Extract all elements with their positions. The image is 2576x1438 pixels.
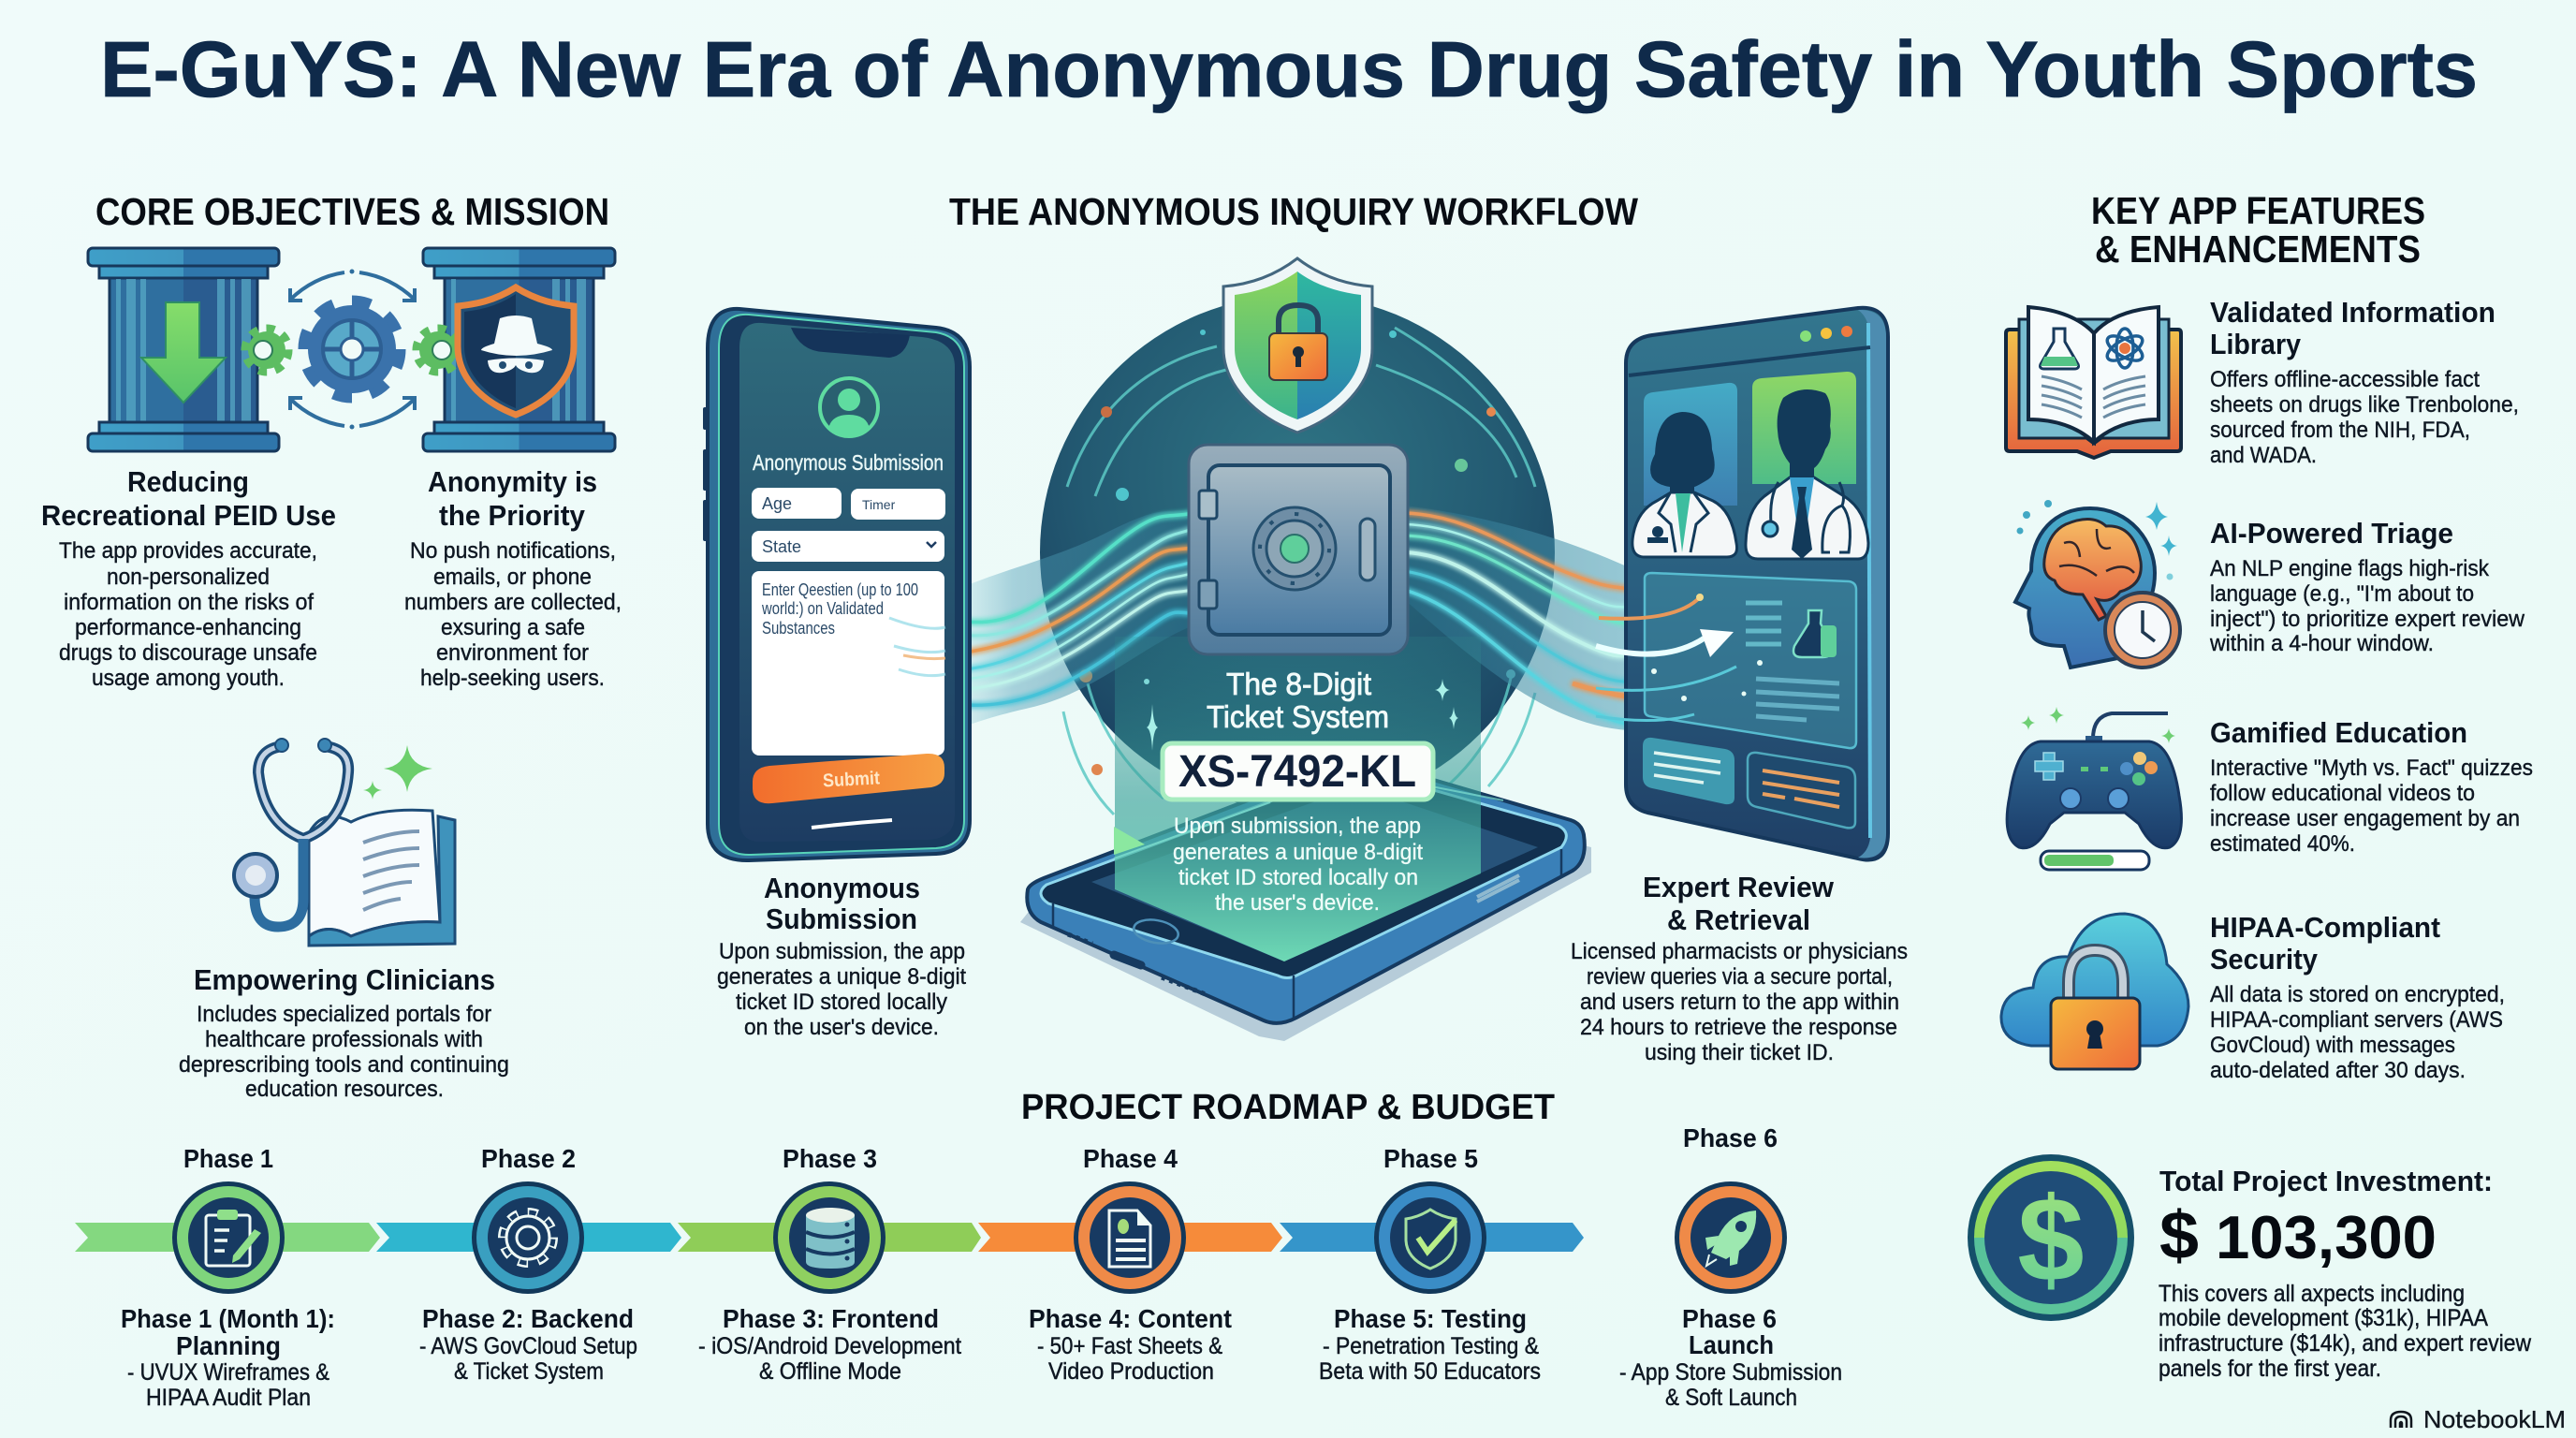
response panel xyxy=(1596,573,1856,748)
text block: AI-powered triage: inject") to prioritize expert review xyxy=(2210,607,2525,632)
phase 2 node: Phase 2 xyxy=(481,1144,576,1173)
text block: validated information library: Library xyxy=(2210,328,2302,360)
text block: AI-powered triage: An NLP engine flags high-risk xyxy=(2210,556,2490,581)
text block: 8-digit ticket system: The 8-Digit xyxy=(1226,667,1371,701)
reviewer cards xyxy=(1632,372,1868,559)
text block: phase 3 details: & Offline Mode xyxy=(759,1358,901,1385)
text block: validated information library: Offers offline-accessible fact xyxy=(2210,367,2480,392)
icon: anonymous shield xyxy=(458,287,574,415)
text block: HIPAA security: All data is stored on encrypted, xyxy=(2210,982,2505,1007)
text block: phase 5 details: - Penetration Testing & xyxy=(1323,1333,1539,1359)
text block: gamified education xyxy=(2210,716,2533,857)
text block: total project investment: This covers all axpects including xyxy=(2159,1281,2465,1307)
icon: dollar coin xyxy=(1968,1154,2134,1321)
data stream: safe to tablet xyxy=(1404,506,1694,730)
form fields: Timer xyxy=(862,497,896,512)
icon: safe xyxy=(1189,445,1408,654)
form fields: Enter Qeestien (up to 100 xyxy=(762,580,918,599)
text block: expert review: & Retrieval xyxy=(1667,903,1810,936)
total amount: 103,300 xyxy=(2216,1203,2437,1271)
text block: validated information library: sourced from the NIH, FDA, xyxy=(2210,418,2470,443)
icon: expert tablet xyxy=(1596,308,1888,859)
text block: 8-digit ticket system: the user's device. xyxy=(1215,890,1380,916)
text block: reducing recreational PEID use: usage among youth. xyxy=(92,666,285,691)
text block: reducing recreational PEID use: Reducing xyxy=(127,465,249,498)
submit button: Submit xyxy=(822,768,881,792)
ticket id: XS-7492-KL xyxy=(1178,747,1416,797)
text block: empowering clinicians: education resources. xyxy=(245,1077,444,1102)
small cards xyxy=(1643,738,1855,828)
icon: smartphone form: Anonymous Submission xyxy=(753,450,944,475)
text block: 8-digit ticket system: ticket ID stored locally on xyxy=(1178,865,1418,890)
icon: security shield xyxy=(1223,258,1372,433)
text block: phase 1 details: Planning xyxy=(176,1331,281,1360)
text block: phase 6 details: Launch xyxy=(1689,1330,1774,1359)
icon: dollar coin: $ xyxy=(2017,1173,2085,1307)
text block: validated information library: and WADA. xyxy=(2210,443,2317,468)
phase 1 node: Phase 1 xyxy=(183,1144,273,1173)
text block: phase 5 details: Beta with 50 Educators xyxy=(1319,1358,1541,1385)
text block: 8-digit ticket system xyxy=(1163,667,1433,916)
text block: phase 5 details xyxy=(1319,1304,1541,1385)
text block: phase 6 details: - App Store Submission xyxy=(1619,1359,1842,1386)
text block: phase 2 details xyxy=(419,1304,637,1385)
phase 5 node xyxy=(1374,1144,1486,1294)
text block: anonymity is the priority: exsuring a safe xyxy=(441,615,585,640)
text block: total project investment xyxy=(2159,1165,2532,1382)
text block: AI-powered triage: within a 4-hour window. xyxy=(2209,631,2434,656)
form fields: world:) on Validated xyxy=(761,599,884,618)
phase 2 node xyxy=(472,1144,584,1294)
text block: phase 6 details: & Soft Launch xyxy=(1665,1385,1797,1411)
text block: anonymity is the priority: environment for xyxy=(436,640,589,666)
text block: phase 1 details xyxy=(121,1304,335,1411)
text block: empowering clinicians: Empowering Clinicians xyxy=(194,963,495,996)
phase 6 node xyxy=(1675,1123,1787,1294)
text block: expert review xyxy=(1571,871,1908,1065)
text block: expert review: Expert Review xyxy=(1643,871,1835,903)
text block: anonymous submission: ticket ID stored locally xyxy=(736,990,947,1015)
heading: roadmap: PROJECT ROADMAP & BUDGET xyxy=(1021,1088,1555,1127)
form fields xyxy=(752,488,945,756)
text block: phase 3 details: - iOS/Android Development xyxy=(698,1333,961,1359)
text block: expert review: using their ticket ID. xyxy=(1645,1040,1834,1065)
text block: phase 4 details: Phase 4: Content xyxy=(1029,1304,1232,1333)
text block: expert review: 24 hours to retrieve the response xyxy=(1580,1015,1897,1040)
text block: HIPAA security: GovCloud) with messages xyxy=(2210,1033,2455,1058)
text block: anonymous submission xyxy=(717,872,966,1040)
text block: phase 4 details xyxy=(1029,1304,1232,1385)
text block: expert review: and users return to the app within xyxy=(1580,990,1899,1015)
text block: 8-digit ticket system: Ticket System xyxy=(1207,699,1389,734)
heading: key features: KEY APP FEATURES xyxy=(2091,189,2425,232)
text block: total project investment: Total Project Investment: xyxy=(2159,1165,2493,1197)
text block: AI-powered triage xyxy=(2209,517,2525,656)
phase 6 node: Phase 6 xyxy=(1683,1123,1778,1152)
text block: reducing recreational PEID use: performance-enhancing xyxy=(75,615,301,640)
text block: 8-digit ticket system: generates a unique 8-digit xyxy=(1173,840,1423,865)
phase 3 node xyxy=(773,1144,886,1294)
text block: 8-digit ticket system: Upon submission, the app xyxy=(1174,814,1421,839)
icon: stethoscope and book xyxy=(234,739,455,946)
text block: anonymity is the priority: emails, or phone xyxy=(433,565,592,590)
icon: pillar with down arrow xyxy=(88,248,279,451)
text block: gamified education: estimated 40%. xyxy=(2210,831,2355,857)
icon: central gears with cycle arrows xyxy=(246,270,459,429)
heading: workflow: THE ANONYMOUS INQUIRY WORKFLOW xyxy=(949,190,1638,233)
text block: phase 4 details: Video Production xyxy=(1048,1358,1214,1385)
text block: empowering clinicians: Includes specialized portals for xyxy=(197,1002,491,1027)
total amount: $ xyxy=(2159,1198,2199,1273)
text block: gamified education: increase user engagement by an xyxy=(2210,806,2520,831)
text block: phase 1 details: Phase 1 (Month 1): xyxy=(121,1304,335,1333)
text block: anonymous submission: Anonymous xyxy=(764,872,920,904)
form fields: Age xyxy=(762,494,792,513)
text block: anonymity is the priority xyxy=(404,465,622,691)
text block: HIPAA security: HIPAA-compliant servers (AWS xyxy=(2210,1007,2503,1033)
watermark: NotebookLM: NotebookLM xyxy=(2423,1405,2566,1433)
text block: phase 2 details: & Ticket System xyxy=(454,1358,604,1385)
text block: phase 2 details: - AWS GovCloud Setup xyxy=(419,1333,637,1359)
icon: bottom phone xyxy=(1020,761,1591,1041)
text block: HIPAA security: HIPAA-Compliant xyxy=(2210,911,2440,944)
text block: phase 5 details: Phase 5: Testing xyxy=(1334,1304,1527,1333)
text block: anonymity is the priority: help-seeking users. xyxy=(420,666,605,691)
text block: HIPAA security: Security xyxy=(2210,943,2319,976)
text block: anonymity is the priority: No push notifications, xyxy=(410,538,616,564)
text block: AI-powered triage: AI-Powered Triage xyxy=(2210,517,2453,550)
light beam xyxy=(1114,637,1503,961)
icon: gamepad xyxy=(2007,707,2181,870)
heading: core objectives: CORE OBJECTIVES & MISSION xyxy=(95,190,609,233)
icon: AI triage head xyxy=(2015,500,2180,668)
text block: phase 2 details: Phase 2: Backend xyxy=(422,1304,634,1333)
form fields: State xyxy=(762,537,801,556)
text block: total project investment: infrastructure ($14k), and expert review xyxy=(2159,1330,2532,1357)
text block: reducing recreational PEID use: Recreational PEID Use xyxy=(41,499,336,532)
text block: expert review: review queries via a secure portal, xyxy=(1587,964,1893,990)
avatar xyxy=(820,378,878,436)
text block: gamified education: follow educational videos to xyxy=(2210,781,2475,806)
text block: anonymous submission: Submission xyxy=(766,902,917,935)
submit button xyxy=(753,754,944,803)
text block: HIPAA security xyxy=(2210,911,2505,1083)
icon: validated library book xyxy=(2006,307,2181,458)
text block: reducing recreational PEID use: drugs to discourage unsafe xyxy=(59,640,317,666)
text block: empowering clinicians xyxy=(179,963,509,1102)
text block: anonymous submission: on the user's device. xyxy=(744,1015,939,1040)
text block: phase 4 details: - 50+ Fast Sheets & xyxy=(1037,1333,1222,1359)
text block: phase 6 details: Phase 6 xyxy=(1682,1304,1777,1333)
phase 3 node: Phase 3 xyxy=(783,1144,877,1173)
text block: phase 3 details: Phase 3: Frontend xyxy=(723,1304,939,1333)
text block: validated information library: Validated Information xyxy=(2210,296,2496,329)
icon: smartphone form xyxy=(703,309,970,860)
text block: anonymity is the priority: the Priority xyxy=(439,499,586,532)
icon: cloud lock xyxy=(2001,914,2188,1069)
text block: anonymous submission: Upon submission, the app xyxy=(719,939,965,964)
disc background xyxy=(1040,295,1555,814)
text block: gamified education: Gamified Education xyxy=(2210,716,2467,749)
text block: anonymous submission: generates a unique 8-digit xyxy=(717,964,966,990)
heading: key features: & ENHANCEMENTS xyxy=(2095,227,2421,271)
text block: phase 6 details xyxy=(1619,1304,1842,1411)
text block: gamified education: Interactive "Myth vs. Fact" quizzes xyxy=(2210,756,2533,781)
text block: validated information library xyxy=(2210,296,2519,468)
phase 4 node xyxy=(1074,1144,1186,1294)
phase 1 node xyxy=(172,1144,285,1294)
text block: phase 3 details xyxy=(698,1304,961,1385)
phase 5 node: Phase 5 xyxy=(1383,1144,1478,1173)
text block: expert review: Licensed pharmacists or physicians xyxy=(1571,939,1908,964)
text block: empowering clinicians: healthcare professionals with xyxy=(205,1027,483,1052)
text block: phase 1 details: HIPAA Audit Plan xyxy=(146,1385,311,1411)
text block: reducing recreational PEID use: information on the risks of xyxy=(64,590,314,615)
text block: anonymity is the priority: numbers are collected, xyxy=(404,590,622,615)
form fields: Substances xyxy=(762,619,835,638)
text block: reducing recreational PEID use: The app provides accurate, xyxy=(59,538,317,564)
text block: reducing recreational PEID use: non-personalized xyxy=(107,565,270,590)
text block: anonymity is the priority: Anonymity is xyxy=(428,465,597,498)
data stream: phone to safe xyxy=(922,509,1193,732)
roadmap arrow bar xyxy=(75,1223,1584,1252)
text block: total project investment: mobile development ($31k), HIPAA xyxy=(2159,1305,2488,1331)
phase 4 node: Phase 4 xyxy=(1083,1144,1178,1173)
text block: total project investment: panels for the first year. xyxy=(2159,1356,2381,1382)
heading: key features xyxy=(2091,189,2425,271)
text block: reducing recreational PEID use xyxy=(41,465,336,691)
text block: HIPAA security: auto-delated after 30 days. xyxy=(2210,1058,2466,1083)
text block: phase 1 details: - UVUX Wireframes & xyxy=(127,1359,329,1386)
text block: AI-powered triage: language (e.g., "I'm about to xyxy=(2210,581,2474,607)
text block: empowering clinicians: deprescribing tools and continuing xyxy=(179,1052,509,1078)
icon: right pillar xyxy=(423,248,615,451)
title: E-GuYS: A New Era of Anonymous Drug Safety in Youth Sports xyxy=(100,25,2478,113)
text block: validated information library: sheets on drugs like Trenbolone, xyxy=(2210,392,2519,418)
